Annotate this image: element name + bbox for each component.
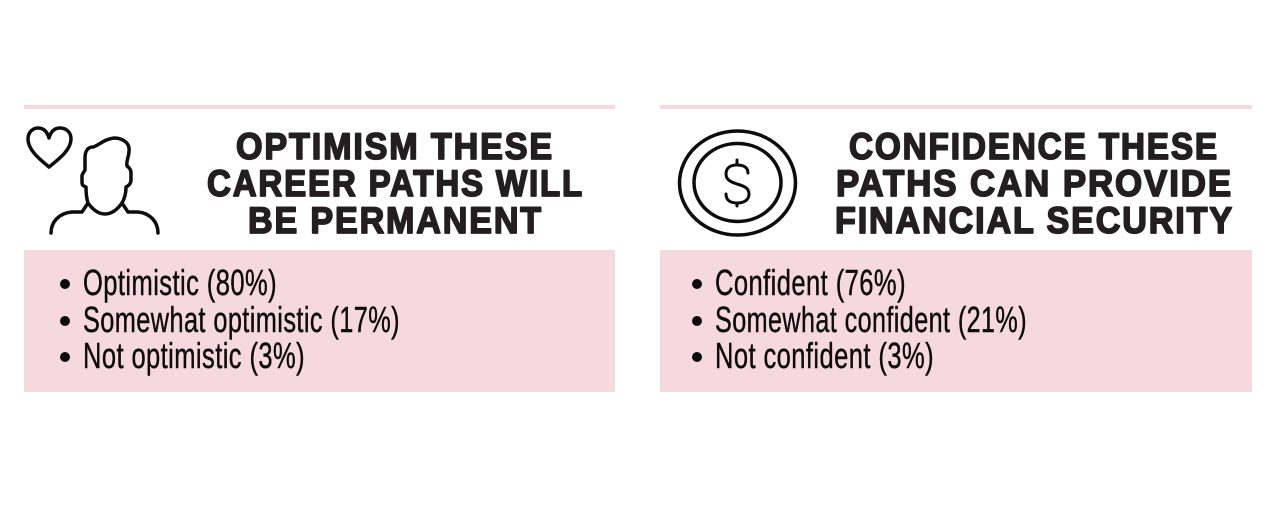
list box: confidence: Not confident (3%): [715, 335, 934, 376]
list box: optimism: [24, 250, 615, 392]
heading: optimism: [207, 126, 584, 241]
heading: optimism: OPTIMISM THESE: [236, 126, 554, 167]
list box: confidence: [660, 250, 1252, 392]
list box: optimism: Somewhat optimistic (17%): [83, 299, 400, 340]
icon: coin with dollar sign: [680, 131, 796, 235]
panel: optimism: [24, 105, 615, 392]
list box: confidence: Confident (76%): [715, 262, 906, 303]
panel: confidence: [660, 105, 1252, 392]
heading: confidence: PATHS CAN PROVIDE: [836, 163, 1233, 204]
heading: optimism: CAREER PATHS WILL: [207, 163, 584, 204]
list box: confidence: Somewhat confident (21%): [715, 299, 1027, 340]
heading: confidence: CONFIDENCE THESE: [849, 126, 1219, 167]
top rule: optimism: [24, 105, 615, 109]
heading: optimism: BE PERMANENT: [248, 200, 543, 241]
list box: optimism: Optimistic (80%): [83, 262, 277, 303]
heading: confidence: [835, 126, 1234, 241]
icon: person with heart: [28, 128, 158, 233]
top rule: confidence: [660, 105, 1252, 109]
heading: confidence: FINANCIAL SECURITY: [835, 200, 1234, 241]
list box: optimism: Not optimistic (3%): [83, 335, 305, 376]
